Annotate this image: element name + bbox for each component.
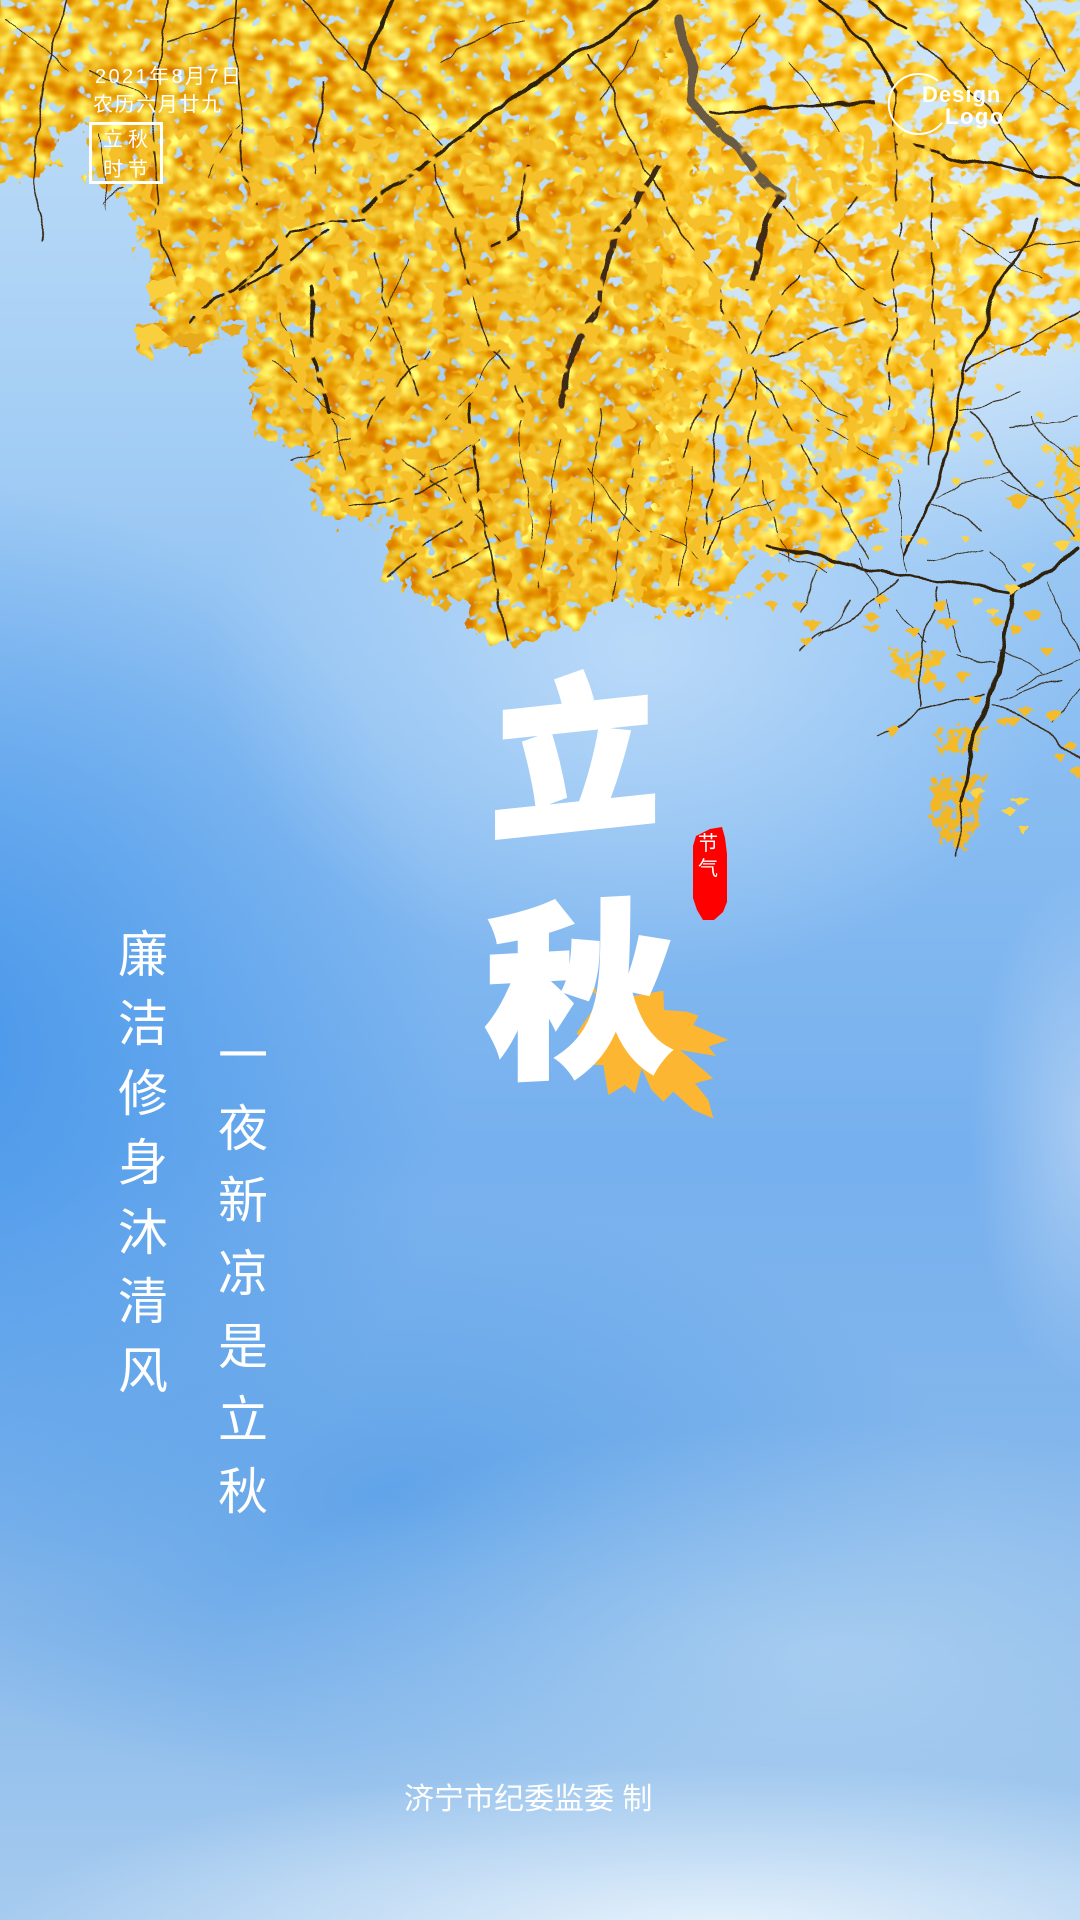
vertical verse: right column: 新 — [218, 1173, 268, 1229]
date text: 2021年8月7日 — [95, 66, 243, 88]
solar term box — [89, 122, 163, 184]
vertical verse: left column: 沐 — [118, 1205, 168, 1261]
box text — [103, 129, 153, 181]
red seal — [693, 827, 727, 920]
vertical verse: right column: 凉 — [218, 1246, 268, 1302]
logo mark: Logo — [945, 104, 1005, 129]
vertical verse: right column: 秋 — [218, 1464, 268, 1520]
vertical verse: right column: 是 — [218, 1319, 268, 1375]
vertical verse: left column: 风 — [118, 1343, 168, 1399]
seal text — [698, 833, 718, 880]
vertical verse: left column: 清 — [118, 1274, 168, 1330]
orange maple leaf — [576, 986, 728, 1118]
scattered ginkgo leaves — [135, 276, 1080, 834]
vertical verse: right column — [218, 1028, 268, 1520]
vertical verse: left column — [118, 927, 168, 1399]
main title character: 秋: 秋 — [486, 838, 672, 1118]
vertical verse: right column: 一 — [218, 1028, 268, 1084]
seal text: 气 — [698, 858, 718, 880]
main title character: 立: 立 — [491, 616, 659, 877]
vertical verse: left column: 廉 — [118, 927, 168, 983]
canopy: sparse leaves overlapping the branches — [100, 130, 960, 610]
canopy: lighter open right foliage — [660, 0, 1080, 614]
logo mark: Design — [922, 82, 1001, 107]
logo mark — [888, 73, 1005, 135]
vertical verse: left column: 修 — [118, 1066, 168, 1122]
canopy: dense golden left and centre foliage — [0, 0, 700, 644]
box text: 时节 — [103, 159, 153, 181]
vertical verse: right column: 立 — [218, 1392, 268, 1448]
vertical verse: left column: 身 — [118, 1135, 168, 1191]
box text: 立秋 — [103, 129, 153, 151]
vertical verse: left column: 洁 — [118, 996, 168, 1052]
lunar date text: 农历六月廿九 — [93, 94, 223, 116]
canopy: hanging and edge leaf clusters — [889, 440, 1080, 848]
vertical verse: right column: 夜 — [218, 1101, 268, 1157]
credit text: 济宁市纪委监委 制 — [404, 1783, 652, 1816]
seal text: 节 — [698, 833, 718, 855]
branches: thick limbs and trunk — [10, 0, 1080, 857]
